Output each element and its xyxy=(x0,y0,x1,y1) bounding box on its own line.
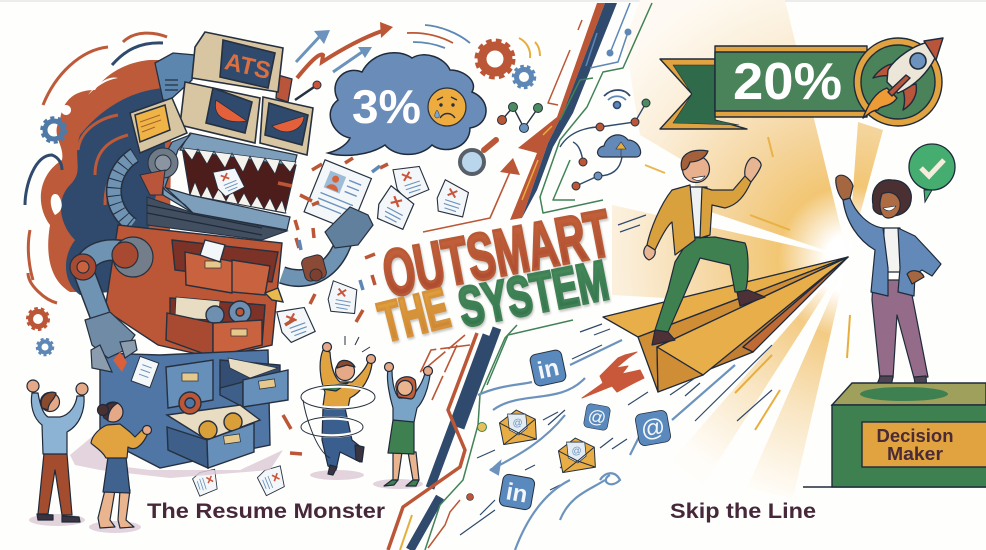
person: man on plane xyxy=(644,150,765,345)
banner: 20% xyxy=(660,46,867,129)
blue box behind head xyxy=(155,53,292,102)
title: outsmart the system: SYSTEM xyxy=(454,249,614,340)
icon: envelope upper xyxy=(498,408,538,445)
speed lines around the plane xyxy=(460,137,850,535)
cabinet: blue lower xyxy=(100,350,288,468)
icon: cloud network xyxy=(560,99,650,190)
icon: linkedin top xyxy=(529,349,567,387)
icon: linkedin bottom xyxy=(498,473,536,511)
monitor: ATS: ATS xyxy=(222,48,273,85)
monitor: ATS xyxy=(192,32,283,92)
person: decision maker xyxy=(836,175,941,397)
flowing blue lines and message icons xyxy=(478,340,735,550)
monitor: angry left eye xyxy=(180,82,260,143)
person: cheering woman xyxy=(384,362,432,486)
robot neck hose xyxy=(114,155,135,225)
title: outsmart the system: OUTSMART xyxy=(377,195,617,311)
caption: skip the line: Skip the Line xyxy=(670,500,816,523)
icon: approval bubble xyxy=(909,144,955,202)
robot antenna xyxy=(295,81,321,100)
icon: gears top centre xyxy=(477,38,540,88)
podium: decision maker xyxy=(803,383,986,487)
panel: right side light rays xyxy=(612,0,883,498)
cabinet: red upper xyxy=(105,225,283,358)
people: left group shadow pools xyxy=(29,430,423,533)
icon: rocket flame behind plane xyxy=(582,352,644,398)
icon: at small xyxy=(583,403,611,431)
paper plane xyxy=(603,257,848,392)
icon: crying face xyxy=(428,88,466,126)
monitor: angry right eye xyxy=(260,97,313,155)
panel: centre dividing stripes and circuits xyxy=(388,3,652,550)
panel: the resume monster xyxy=(25,32,472,497)
podium: decision maker: Maker xyxy=(887,444,943,464)
20% figure: 20% xyxy=(733,53,842,111)
icon: network nodes xyxy=(498,102,542,132)
callout: 3% speech cloud xyxy=(328,53,486,155)
caption: the resume monster: The Resume Monster xyxy=(147,500,385,523)
arrows above the monster xyxy=(296,22,470,78)
jaw hinge xyxy=(148,148,178,178)
person: woman with bun xyxy=(91,402,152,528)
icon: envelope lower xyxy=(557,436,597,473)
podium: decision maker: Decision xyxy=(876,426,954,446)
person: spinning man xyxy=(301,336,376,475)
title: outsmart the system: THE xyxy=(373,276,455,354)
neck coil xyxy=(140,170,287,240)
arm: right with resume xyxy=(282,160,373,282)
arm: left with claw xyxy=(70,237,153,372)
3% figure: 3% xyxy=(352,80,421,133)
icon: gears lower left xyxy=(28,308,53,355)
icon: gear blue left xyxy=(42,118,66,142)
icon: wifi xyxy=(604,90,630,108)
icon: magnifier xyxy=(460,140,496,174)
icon: at large xyxy=(634,409,672,447)
person: man with raised arms xyxy=(27,380,88,522)
monitor: yellow side screen xyxy=(130,98,187,153)
monster mouth with teeth xyxy=(155,133,297,230)
resume pieces flying xyxy=(131,158,472,497)
smoke cloud xyxy=(25,33,172,303)
icon: rocket badge xyxy=(854,38,943,126)
